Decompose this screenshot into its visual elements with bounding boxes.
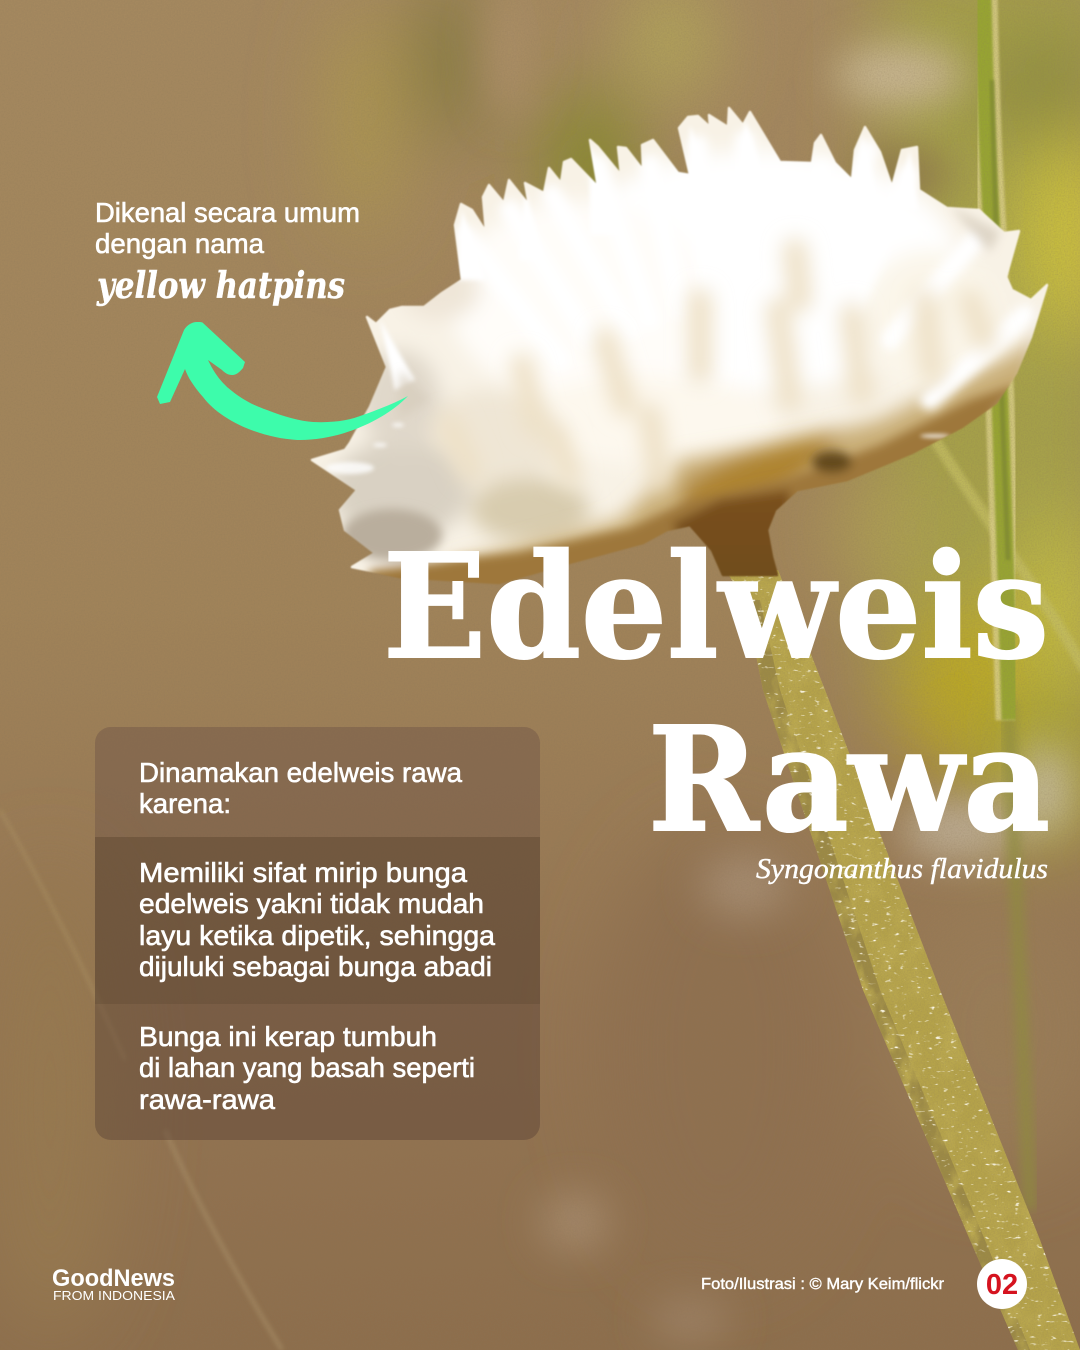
intro text: common name <box>95 197 360 307</box>
panel text: heading <box>139 757 462 819</box>
panel text: heading: Dinamakan edelweis rawa <box>139 757 462 788</box>
panel text: second reason: di lahan yang basah seperti <box>139 1052 475 1083</box>
title: Edelweis Rawa: Rawa <box>648 695 1050 864</box>
intro text: common name: dengan nama <box>95 228 264 259</box>
flower head: white edelweiss bloom <box>310 106 1050 584</box>
logo: GoodNews from Indonesia: FROM INDONESIA <box>53 1289 176 1303</box>
panel text: heading: karena: <box>139 788 231 819</box>
title: Edelweis Rawa <box>383 522 1050 864</box>
title: Edelweis Rawa: Edelweis <box>383 522 1049 691</box>
panel text: first reason: Memiliki sifat mirip bunga <box>139 857 467 888</box>
panel text: second reason: rawa-rawa <box>139 1084 275 1115</box>
photo credit: Foto/Ilustrasi : © Mary Keim/flickr <box>701 1276 945 1293</box>
panel text: second reason <box>139 1021 475 1115</box>
panel text: first reason <box>139 857 495 982</box>
panel text: first reason: dijuluki sebagai bunga abadi <box>139 951 492 982</box>
scientific name: Syngonanthus flavidulus <box>756 854 1048 885</box>
logo: GoodNews from Indonesia: GoodNews <box>52 1265 175 1292</box>
page number badge <box>977 1259 1027 1309</box>
panel text: first reason: layu ketika dipetik, sehingga <box>139 920 495 951</box>
panel text: second reason: Bunga ini kerap tumbuh <box>139 1021 437 1052</box>
flower stem <box>730 570 1080 1350</box>
intro text: common name: Dikenal secara umum <box>95 197 360 228</box>
panel: explanation of the name <box>95 727 540 1140</box>
petals: soft white streaks <box>465 140 1025 400</box>
highlighted name: yellow hatpins: yellow hatpins <box>96 265 345 307</box>
flower bottom shading <box>446 332 1033 565</box>
panel text: first reason: edelweis yakni tidak mudah <box>139 888 484 919</box>
page number badge: 02 <box>986 1269 1018 1301</box>
arrow: green curved arrow from flower to name <box>157 322 408 440</box>
